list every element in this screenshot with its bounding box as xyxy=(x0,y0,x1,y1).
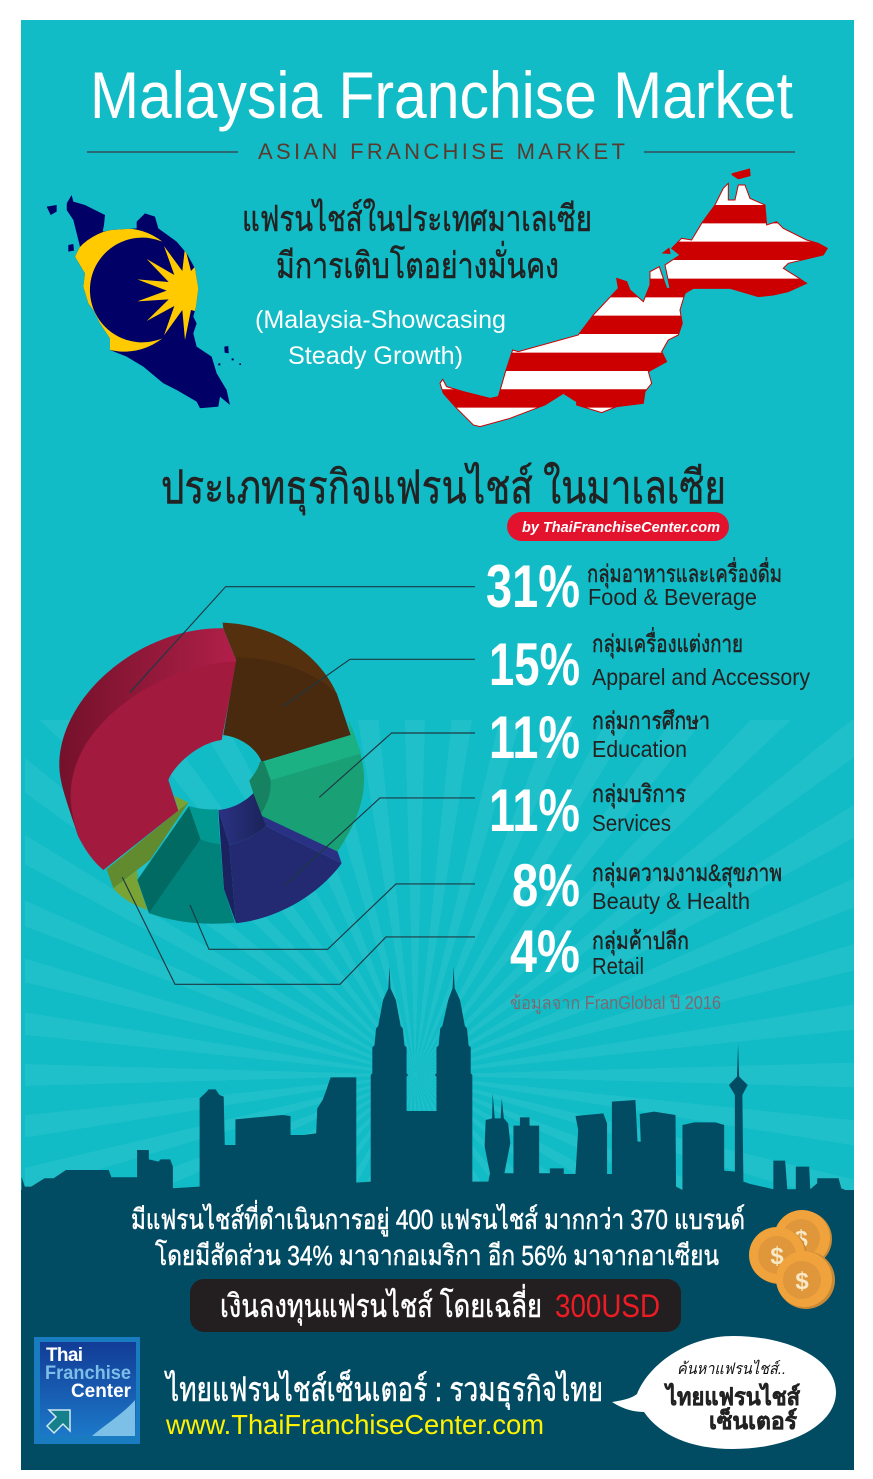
legend: services: Services xyxy=(592,810,671,836)
legend: education: กลุ่มการศึกษา xyxy=(592,708,710,736)
legend: retail: 4% xyxy=(510,918,580,985)
legend: apparel: Apparel and Accessory xyxy=(592,664,810,690)
legend: beauty and health xyxy=(512,852,782,919)
leader lines xyxy=(122,587,475,984)
slice: apparel 15% xyxy=(223,623,351,762)
main title: Malaysia Franchise Market xyxy=(90,58,793,132)
legend: services: กลุ่มบริการ xyxy=(592,781,686,809)
legend: services xyxy=(489,777,686,844)
legend: services: 11% xyxy=(489,777,580,844)
average investment pill: 300USD xyxy=(555,1288,660,1324)
city skyline silhouette xyxy=(22,967,853,1427)
intro English subheading: Steady Growth) xyxy=(288,342,463,370)
icon: gold coins xyxy=(749,1210,835,1309)
credit pill: by ThaiFranchiseCenter.com xyxy=(522,519,720,536)
legend: education: Education xyxy=(592,736,687,762)
source note: ข้อมูลจาก FranGlobal ปี 2016 xyxy=(510,993,721,1014)
icon: gold coins: $ xyxy=(770,1243,784,1270)
legend: beauty and health: Beauty & Health xyxy=(592,888,750,914)
legend: education: 11% xyxy=(489,704,580,771)
speech bubble: เซ็นเตอร์ xyxy=(709,1406,798,1434)
legend: apparel: กลุ่มเครื่องแต่งกาย xyxy=(592,627,743,659)
legend: food and beverage: 31% xyxy=(486,553,580,620)
slice: education 11% xyxy=(249,719,364,852)
sunburst rays background xyxy=(25,720,854,1200)
average investment pill: เงินลงทุนแฟรนไชส์ โดยเฉลี่ย xyxy=(220,1284,542,1326)
dark footer ground xyxy=(21,1190,854,1470)
legend: retail: กลุ่มค้าปลีก xyxy=(592,928,689,956)
3D donut pie chart xyxy=(59,587,475,984)
legend: education xyxy=(489,704,710,771)
speech bubble: ค้นหาแฟรนไชส์.. xyxy=(677,1359,786,1378)
intro English subheading xyxy=(255,306,506,370)
speech bubble xyxy=(612,1336,836,1449)
franchise stats text xyxy=(131,1200,745,1271)
logo: Thai Franchise Center: Thai xyxy=(46,1345,83,1366)
logo: Thai Franchise Center: Franchise xyxy=(45,1363,131,1384)
slice: services 11% xyxy=(218,793,342,923)
slice: retail 4% xyxy=(107,796,188,910)
logo: Thai Franchise Center xyxy=(34,1337,140,1444)
speech bubble: ไทยแฟรนไชส์ xyxy=(663,1382,800,1411)
map: peninsular Malaysia with flag moon and star xyxy=(46,195,241,408)
footer brand line: ไทยแฟรนไชส์เซ็นเตอร์ : รวมธุรกิจไทย xyxy=(164,1369,603,1410)
franchise stats text: โดยมีสัดส่วน 34% มาจากอเมริกา อีก 56% มาจากอาเซียน xyxy=(155,1239,719,1271)
subtitle with rules: ASIAN FRANCHISE MARKET xyxy=(258,139,625,164)
icon: gold coins: $ xyxy=(794,1226,808,1253)
legend: food and beverage xyxy=(486,553,782,620)
icon: gold coins: $ xyxy=(795,1268,809,1295)
legend: beauty and health: 8% xyxy=(512,852,580,919)
credit pill xyxy=(507,512,729,541)
legend: retail xyxy=(510,918,689,985)
legend: food and beverage: Food & Beverage xyxy=(588,584,757,610)
legend: retail: Retail xyxy=(592,953,644,979)
legend: food and beverage: กลุ่มอาหารและเครื่องดื่ม xyxy=(587,557,782,589)
intro Thai heading: แฟรนไชส์ในประเทศมาเลเซีย xyxy=(242,198,592,239)
slice: food and beverage 31% xyxy=(59,628,237,870)
map: East and West Malaysia striped xyxy=(430,160,830,430)
average investment pill xyxy=(190,1279,681,1332)
section heading: ประเภทธุรกิจแฟรนไชส์ ในมาเลเซีย xyxy=(161,461,726,516)
slice: beauty and health 8% xyxy=(137,806,235,924)
intro Thai heading xyxy=(242,198,592,286)
legend: apparel xyxy=(489,627,810,698)
intro Thai heading: มีการเติบโตอย่างมั่นคง xyxy=(276,241,559,286)
legend: beauty and health: กลุ่มความงาม&สุขภาพ xyxy=(592,860,782,888)
intro English subheading: (Malaysia-Showcasing xyxy=(255,306,506,334)
legend: apparel: 15% xyxy=(489,631,580,698)
logo: Thai Franchise Center: Center xyxy=(71,1381,132,1402)
website url: www.ThaiFranchiseCenter.com xyxy=(165,1409,544,1440)
franchise stats text: มีแฟรนไชส์ที่ดำเนินการอยู่ 400 แฟรนไชส์ มากกว่า 370 แบรนด์ xyxy=(131,1200,745,1237)
